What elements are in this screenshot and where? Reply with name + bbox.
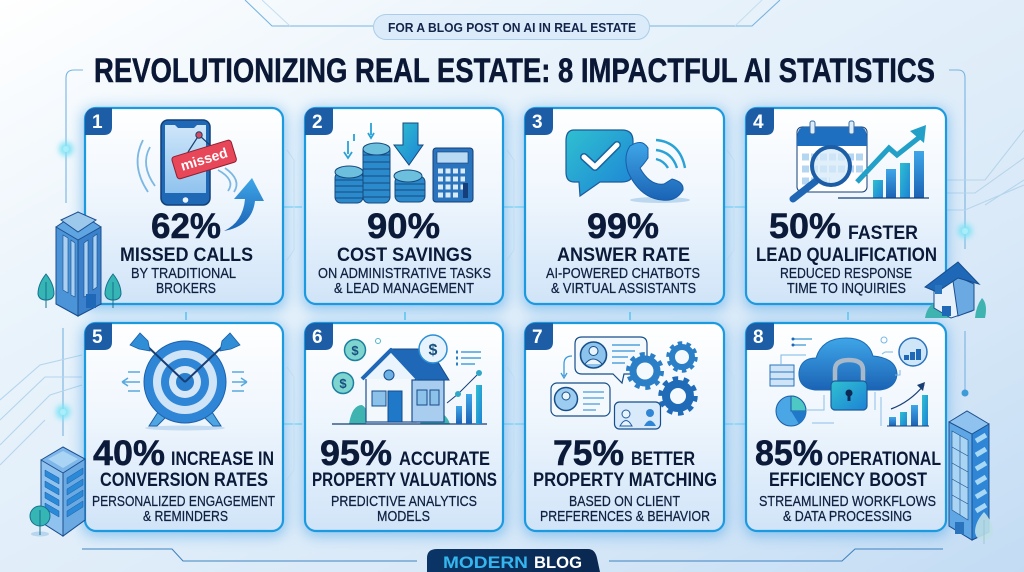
badge 1: 1: [92, 112, 103, 133]
panel: card 4 lead qualification: [746, 108, 946, 304]
badge 6: [305, 323, 333, 350]
panel: card 2 cost savings: [305, 108, 503, 304]
icon: cloud with padlock and charts: [770, 337, 929, 426]
panel: card 7 property matching: [525, 323, 724, 531]
description: [780, 265, 912, 297]
stat 90%: 90%: [367, 207, 440, 246]
label: increase in: INCREASE IN: [171, 449, 274, 470]
badge 7: [525, 323, 553, 350]
label: lead qualification: LEAD QUALIFICATION: [756, 245, 937, 266]
footer brand pill: MODERN: [443, 553, 528, 572]
footer brand pill: [427, 549, 600, 572]
icon: phone with missed sign: [138, 120, 237, 205]
description: STREAMLINED WORKFLOWS: [759, 493, 936, 510]
panel: card 1 missed calls: [85, 108, 283, 304]
icon: lower right tower: [949, 411, 993, 544]
description: MODELS: [377, 508, 430, 525]
description: TIME TO INQUIRIES: [787, 280, 906, 297]
icon: house at card 4 corner: [925, 262, 986, 318]
icon: house with dollar coins: [332, 335, 487, 424]
description: BROKERS: [156, 280, 216, 297]
description: [759, 493, 936, 525]
panel: card 8 operational efficiency: [746, 323, 946, 531]
stat 50%: 50%: [769, 207, 841, 246]
label: conversion rates: CONVERSION RATES: [100, 470, 268, 491]
label: cost savings: COST SAVINGS: [337, 245, 472, 266]
icon: coin stacks and calculator: [335, 123, 473, 203]
icon: target with arrows: [122, 333, 247, 430]
description: PREFERENCES & BEHAVIOR: [540, 508, 710, 525]
stat 40%: 40%: [93, 434, 165, 473]
panel: card 6 property valuations: [305, 323, 503, 531]
description: ON ADMINISTRATIVE TASKS: [318, 265, 491, 282]
description: BASED ON CLIENT: [569, 493, 680, 510]
badge 7: 7: [532, 327, 543, 348]
panel: card 5 conversion rates: [85, 323, 283, 531]
badge 4: 4: [753, 112, 764, 133]
icon: lower left tower: [30, 447, 85, 536]
description: [331, 493, 477, 525]
icon: house with dollar coins: $: [339, 376, 347, 391]
badge 6: 6: [312, 327, 323, 348]
context pill: [374, 14, 650, 40]
icon: house with dollar coins: $: [429, 342, 438, 359]
badge 4: [746, 108, 774, 135]
icon: house with dollar coins: $: [351, 343, 359, 358]
description: [540, 493, 710, 525]
icon: left office tower: [38, 212, 121, 316]
label: faster: FASTER: [848, 223, 918, 244]
stat 99%: 99%: [587, 207, 659, 246]
label: efficiency boost: EFFICIENCY BOOST: [769, 470, 927, 491]
description: REDUCED RESPONSE: [780, 265, 912, 282]
badge 8: [746, 323, 774, 350]
description: [131, 265, 236, 297]
badge 2: [305, 108, 333, 135]
badge 5: 5: [92, 327, 103, 348]
description: & DATA PROCESSING: [783, 508, 912, 525]
card glows: [82, 108, 948, 536]
badge 8: 8: [753, 327, 764, 348]
icon: chat bubble and phone: [566, 130, 690, 203]
footer brand pill: BLOG: [534, 553, 582, 572]
badge 3: [525, 108, 553, 135]
description: PREDICTIVE ANALYTICS: [331, 493, 477, 510]
description: & VIRTUAL ASSISTANTS: [551, 280, 696, 297]
badge 5: [85, 323, 112, 350]
label: property matching: PROPERTY MATCHING: [533, 470, 717, 491]
icon: calendar, magnifier and growth chart: [793, 121, 929, 199]
label: operational: OPERATIONAL: [827, 449, 941, 470]
description: AI-POWERED CHATBOTS: [546, 265, 700, 282]
description: & REMINDERS: [143, 508, 228, 525]
label: answer rate: ANSWER RATE: [557, 245, 690, 266]
label: better: BETTER: [631, 449, 695, 470]
description: [546, 265, 700, 297]
stat 75%: 75%: [553, 434, 624, 473]
context pill: FOR A BLOG POST ON AI IN REAL ESTATE: [388, 20, 636, 35]
stat 95%: 95%: [320, 434, 392, 473]
label: missed calls: MISSED CALLS: [120, 245, 253, 266]
badge 3: 3: [532, 112, 543, 133]
description: PERSONALIZED ENGAGEMENT: [92, 493, 275, 510]
description: [318, 265, 491, 297]
stat 62%: 62%: [151, 207, 221, 246]
badge 1: [85, 108, 112, 135]
badge 2: 2: [312, 112, 323, 133]
label: accurate: ACCURATE: [399, 449, 490, 470]
stat 85%: 85%: [755, 434, 823, 473]
label: property valuations: PROPERTY VALUATIONS: [312, 470, 497, 491]
description: [92, 493, 275, 525]
panel: card 3 answer rate: [525, 108, 724, 304]
icon: profiles and gears: [551, 337, 696, 429]
description: BY TRADITIONAL: [131, 265, 236, 282]
icon: phone with missed sign: missed: [179, 144, 229, 174]
arrow: rebound: [224, 178, 264, 231]
description: & LEAD MANAGEMENT: [334, 280, 474, 297]
